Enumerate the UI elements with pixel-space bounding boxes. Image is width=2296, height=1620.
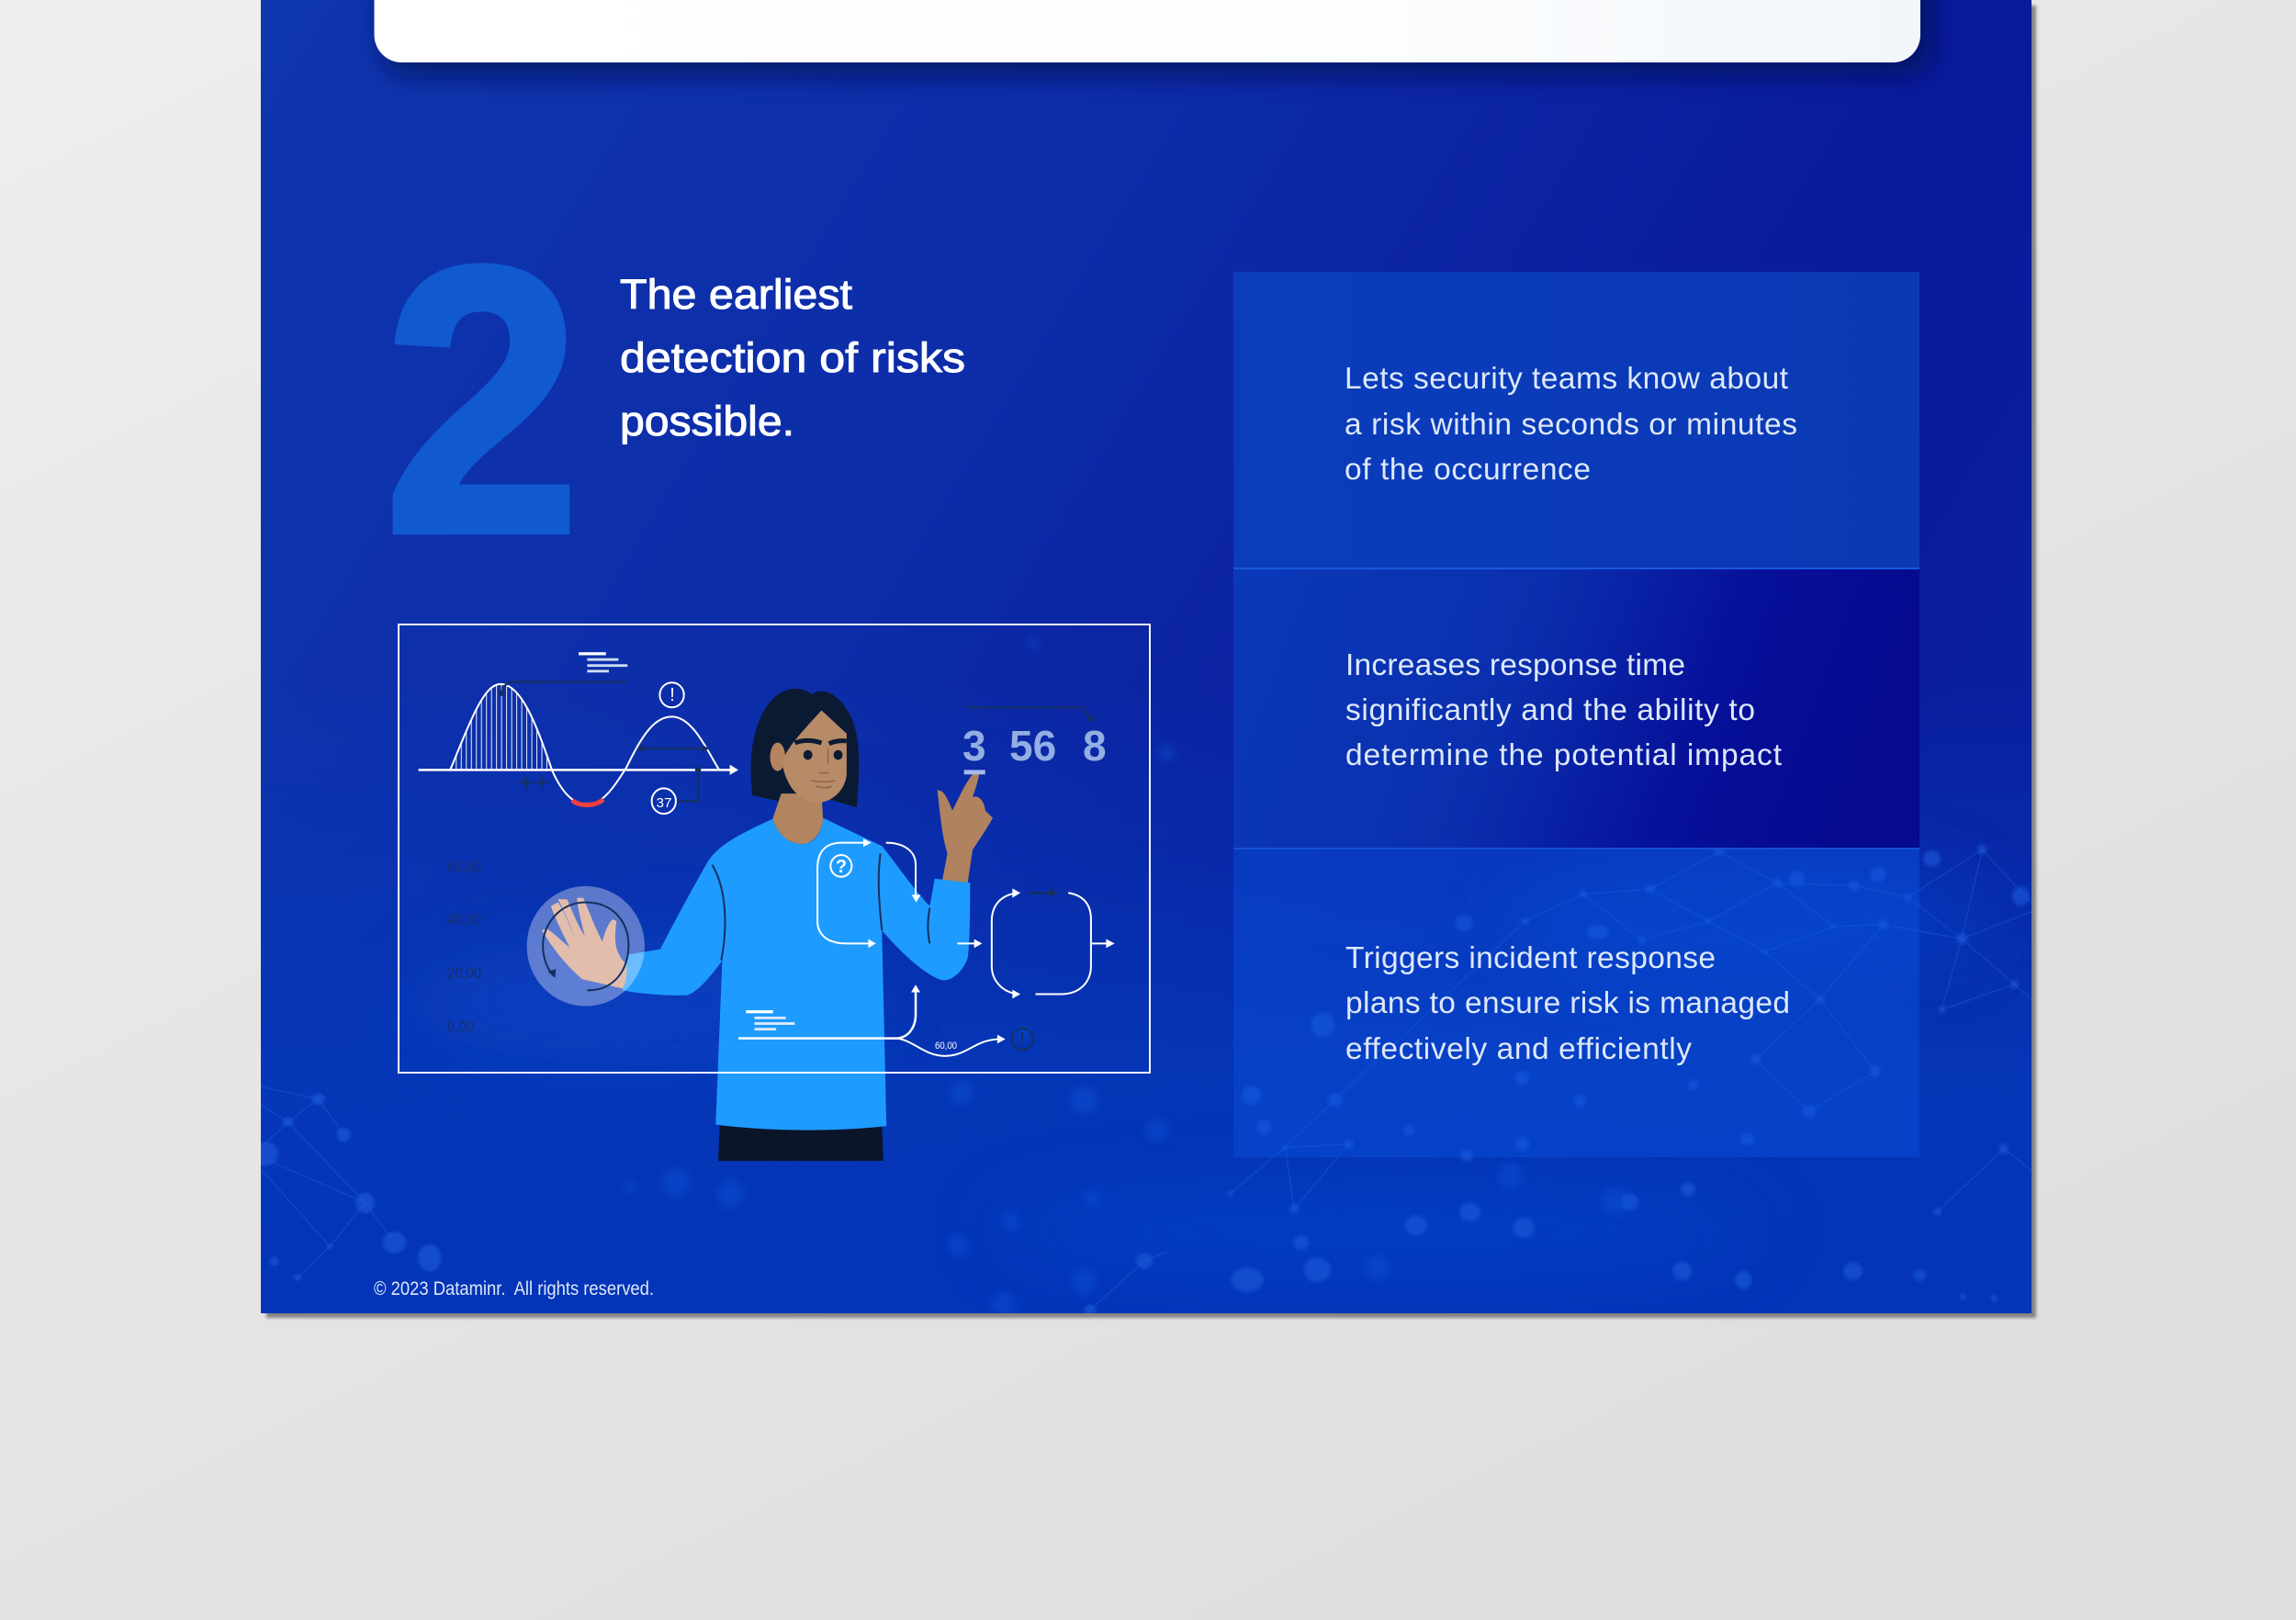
- panel text: incident response: effectively and efficiently: [1345, 1032, 1692, 1066]
- axis labels: [447, 858, 481, 1035]
- icon labels: ?: [836, 857, 847, 877]
- white card: [375, 0, 1932, 75]
- panel: response time: [1233, 568, 1919, 849]
- flow lines and arrows: [738, 838, 1115, 1056]
- panel text: response time: Increases response time: [1345, 648, 1685, 682]
- panel text: response time: determine the potential impact: [1345, 738, 1783, 772]
- page shadow: [266, 6, 2036, 1318]
- icon: glowing hand circle: [527, 886, 645, 1007]
- chart: sine wave: [419, 652, 1095, 814]
- icon labels: 60,00: [935, 1041, 957, 1052]
- panel text: incident response: Triggers incident response: [1345, 941, 1716, 975]
- section heading: The earliest: [620, 271, 853, 318]
- big numeral 2: 2: [384, 189, 580, 612]
- background glow and network: [253, 637, 2037, 1332]
- copyright: © 2023 Dataminr. All rights reserved.: [374, 1277, 654, 1299]
- panel text: know about a risk: Lets security teams know about: [1345, 362, 1789, 396]
- panel text: incident response: plans to ensure risk is managed: [1345, 986, 1790, 1020]
- poster page: [261, 0, 2032, 1313]
- axis labels: 60,00: [447, 858, 481, 875]
- interface frame: [399, 624, 1150, 1073]
- section heading: detection of risks: [620, 334, 965, 381]
- illustration: person with interface: [399, 624, 1150, 1161]
- icon labels: !: [670, 685, 675, 705]
- axis labels: 0,00: [447, 1018, 474, 1035]
- number readout: 3: [962, 722, 986, 770]
- panel text: response time: significantly and the ability to: [1345, 693, 1755, 727]
- section heading: possible.: [620, 398, 794, 444]
- axis labels: 40,00: [447, 911, 481, 928]
- icon labels: [656, 685, 1025, 1052]
- woman figure: [623, 689, 993, 1161]
- panel text: know about a risk: of the occurrence: [1345, 453, 1591, 487]
- panel: incident response: [1233, 848, 1919, 1157]
- axis labels: 20,00: [447, 964, 481, 982]
- panel: security teams: [1233, 272, 1919, 568]
- icon labels: 37: [656, 795, 672, 811]
- panel text: know about a risk: a risk within seconds or minutes: [1345, 408, 1797, 442]
- icon labels: !: [1019, 1029, 1025, 1050]
- number readout: 56: [1009, 722, 1056, 770]
- number readout: 8: [1083, 722, 1107, 770]
